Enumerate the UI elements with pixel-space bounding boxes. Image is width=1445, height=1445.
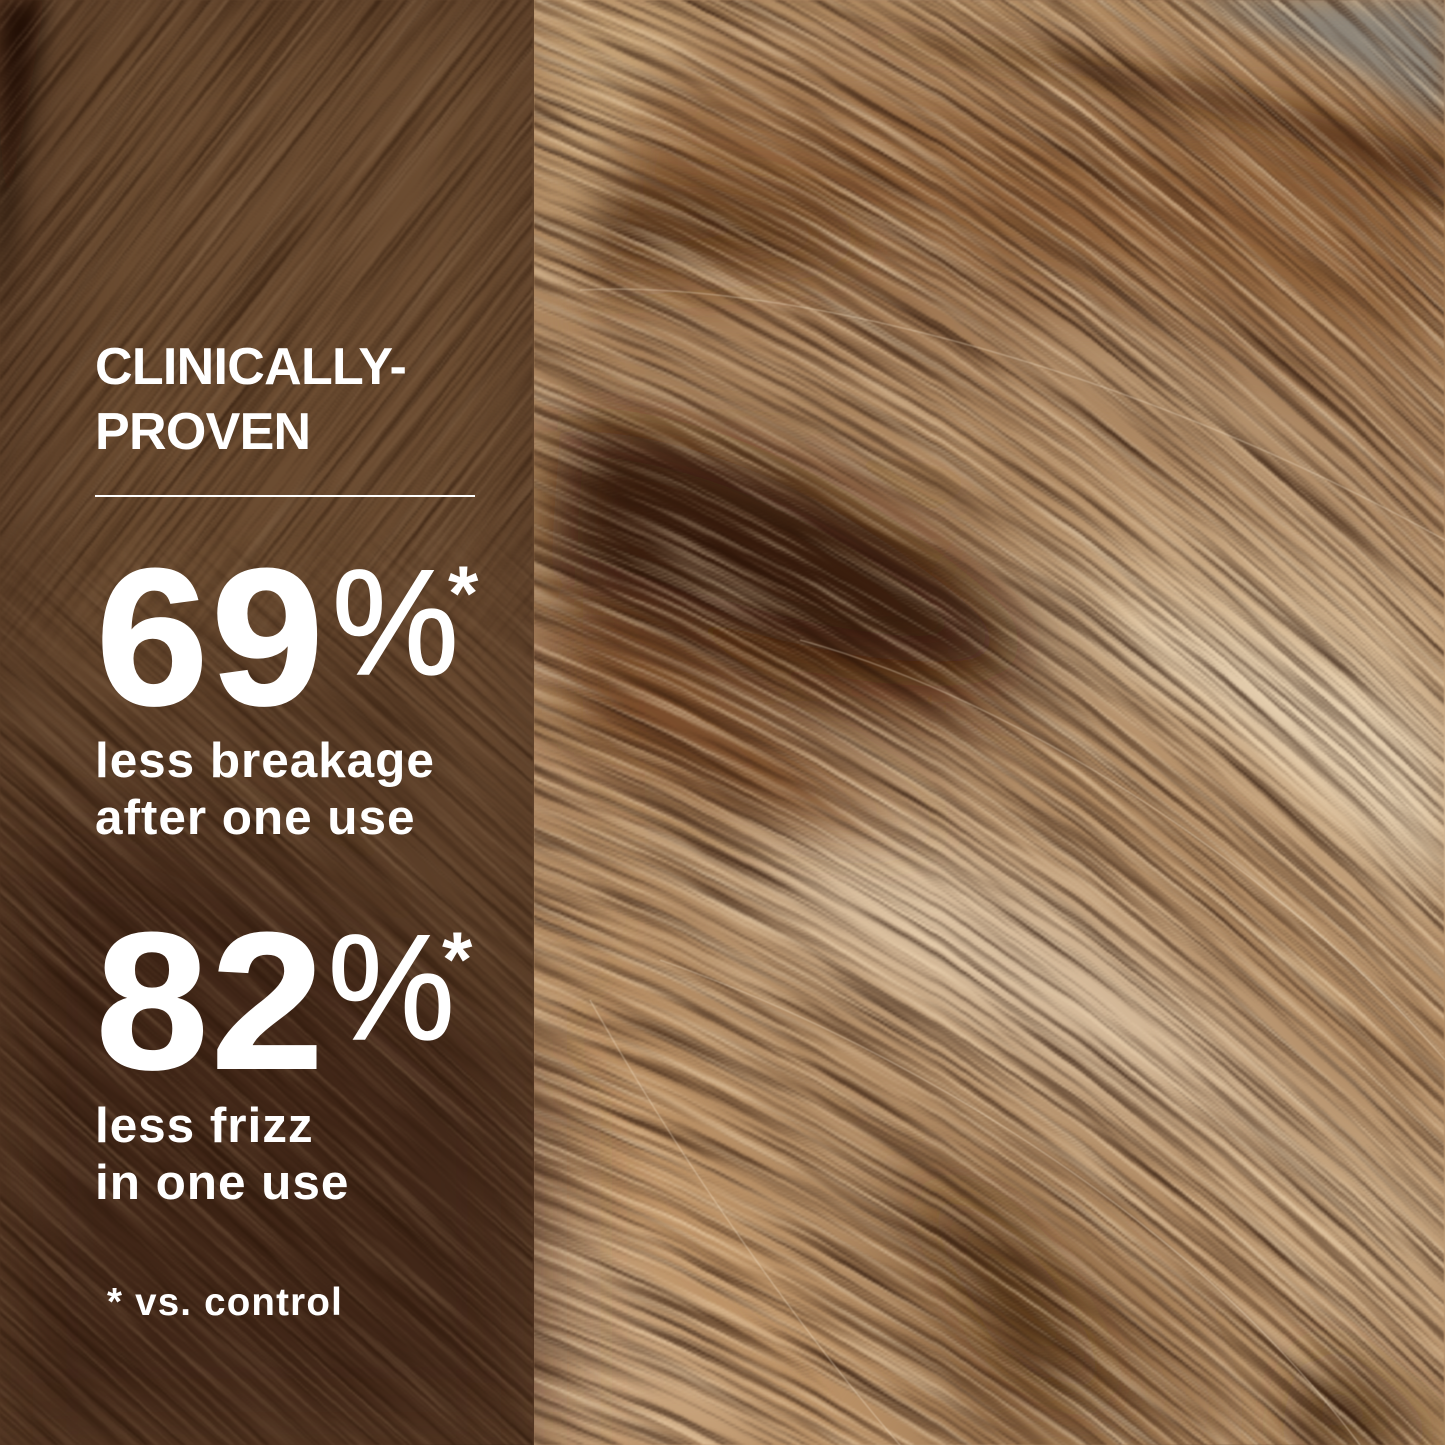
- stat: 69%: [95, 529, 478, 845]
- percent sign: %: [332, 538, 459, 706]
- right hair: fine light flyaways: [580, 289, 1445, 1445]
- percent sign: %: [328, 903, 455, 1071]
- top right grey background: [1180, 0, 1445, 125]
- asterisk: *: [442, 915, 472, 1003]
- number 69: 69: [96, 529, 327, 746]
- left hair under panel: [0, 0, 534, 1445]
- caption: after one use: [95, 790, 415, 845]
- caption: less frizz: [95, 1098, 314, 1153]
- hair texture: left upper strands: [0, 0, 533, 626]
- panel: translucent dark overlay: [0, 0, 534, 1445]
- hair texture: left lower strands: [0, 500, 534, 1445]
- footnote: * vs. control: [107, 1281, 343, 1324]
- divider: [95, 495, 475, 497]
- number 82: 82: [96, 893, 327, 1110]
- hair texture: right strands: [534, 0, 1445, 1445]
- stat: 82%: [95, 893, 472, 1210]
- heading: CLINICALLY-: [95, 338, 406, 396]
- dark hair band top: [840, 40, 1445, 205]
- broad tonal areas: [540, 100, 1445, 1445]
- caption: in one use: [95, 1155, 349, 1210]
- caption: [95, 733, 435, 845]
- asterisk: *: [448, 549, 478, 637]
- heading: [95, 338, 406, 461]
- caption: [95, 1098, 349, 1210]
- heading: PROVEN: [95, 403, 310, 461]
- caption: less breakage: [95, 733, 435, 788]
